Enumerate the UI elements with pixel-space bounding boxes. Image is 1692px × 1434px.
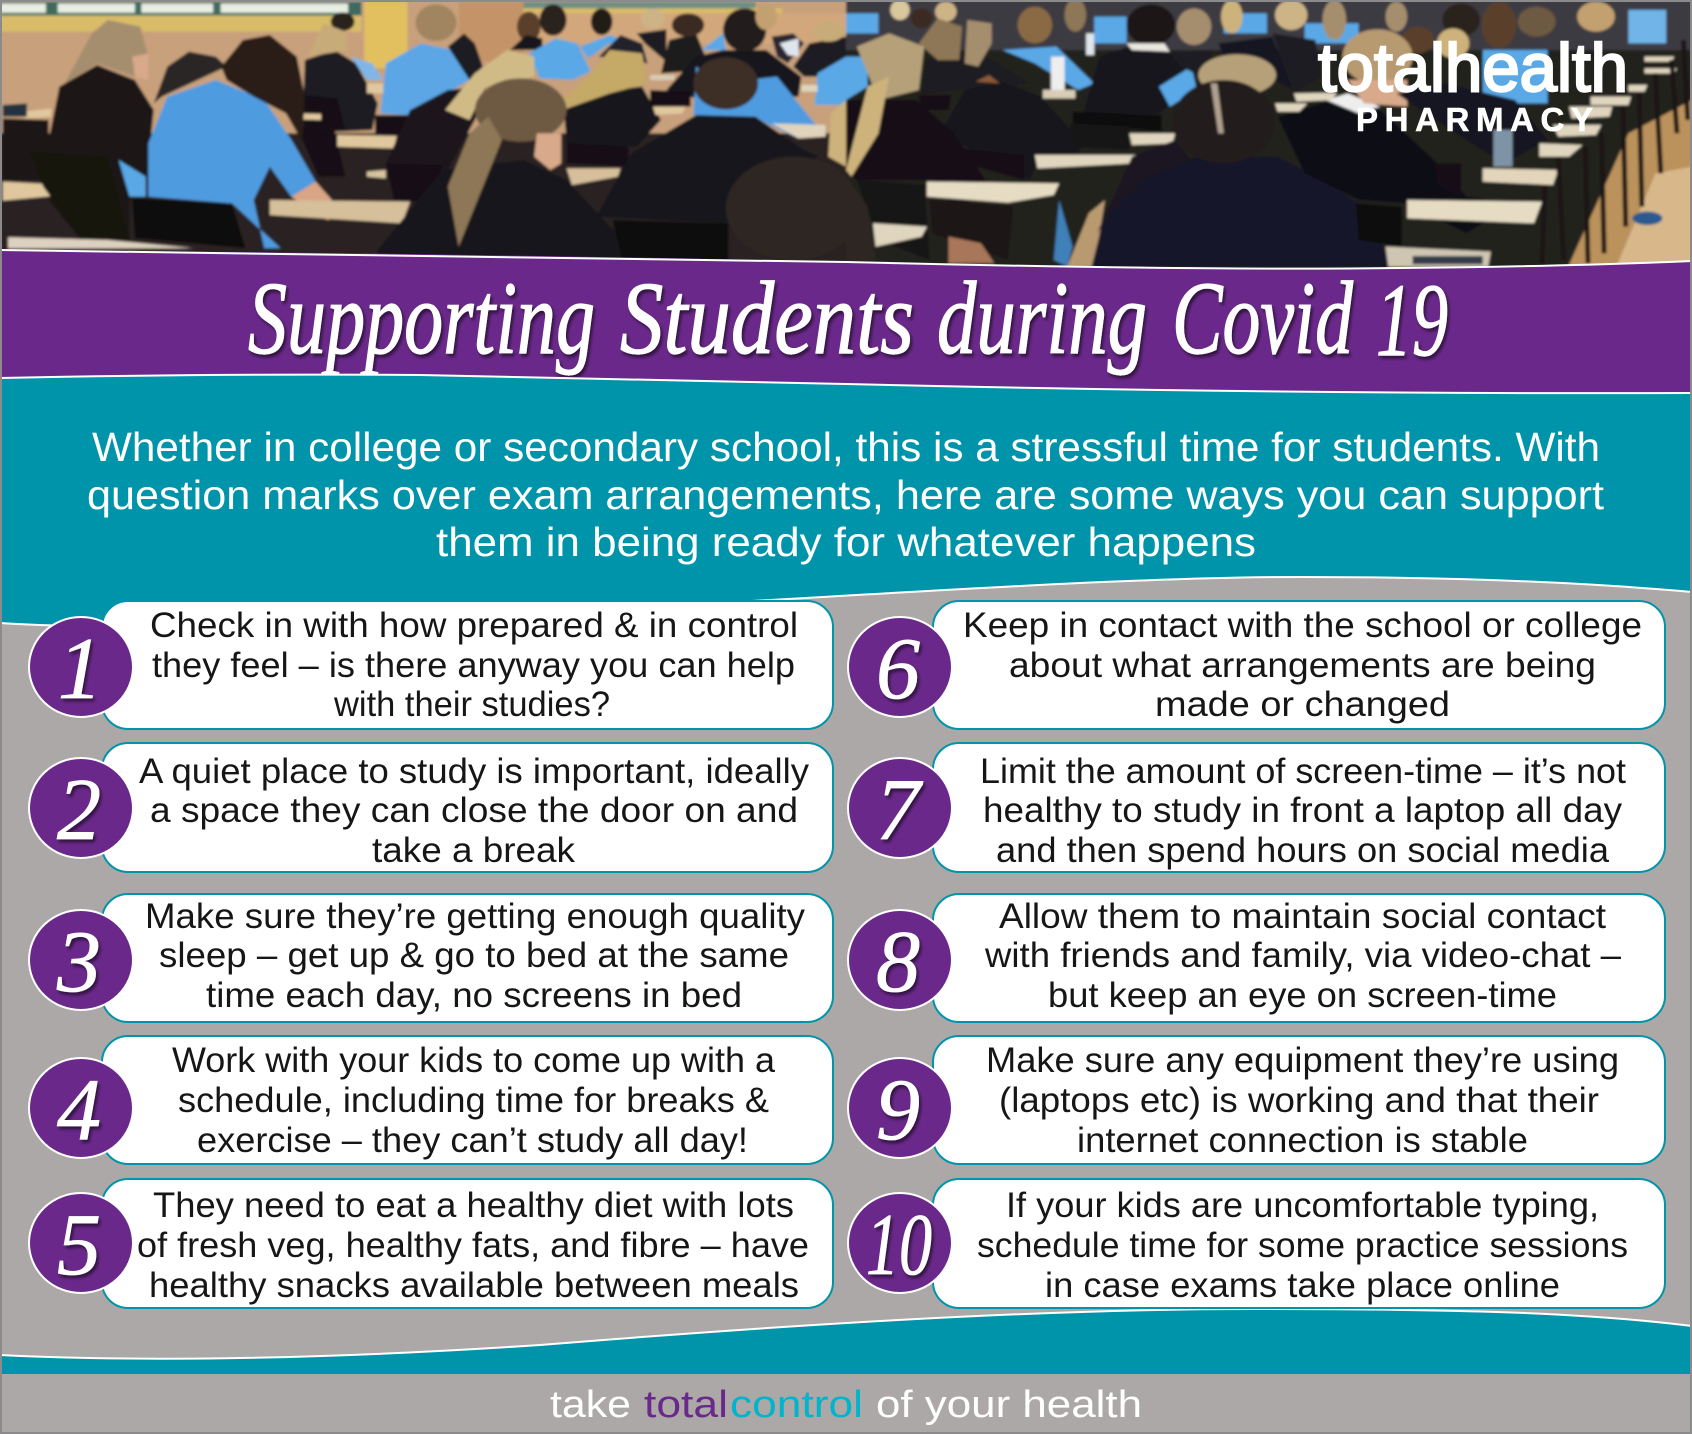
footer tagline: take: [550, 1384, 631, 1426]
tip 10: in case exams take place online: [1045, 1266, 1560, 1305]
title text: 19: [1376, 263, 1448, 378]
title text: [248, 261, 1448, 378]
teal intro panel: [0, 375, 1692, 626]
tip 8: Allow them to maintain social contact: [999, 897, 1606, 936]
tip 3: time each day, no screens in bed: [206, 976, 742, 1015]
tip 7: Limit the amount of screen-time – it’s not: [980, 752, 1626, 791]
footer tagline: of your health: [876, 1384, 1142, 1426]
title text: Covid: [1172, 261, 1354, 376]
tip 5: of fresh veg, healthy fats, and fibre – have: [137, 1226, 809, 1265]
tip 8: [848, 894, 1665, 1022]
logo: totalhealth pharmacy: totalhealth: [1318, 30, 1628, 106]
tip 7: healthy to study in front a laptop all day: [983, 791, 1623, 830]
title text: Supporting: [248, 261, 595, 376]
tip 6: Keep in contact with the school or college: [963, 606, 1642, 645]
tip 2: A quiet place to study is important, ideally: [139, 752, 810, 791]
tip 10: [848, 1179, 1665, 1308]
tip 1: Check in with how prepared & in control: [150, 606, 798, 645]
header photo: students in exam hall: [0, 0, 1692, 277]
title banner: [0, 250, 1692, 393]
tip 9: (laptops etc) is working and that their: [999, 1081, 1599, 1120]
tip 4: 4: [57, 1062, 101, 1159]
tip 6: about what arrangements are being: [1009, 646, 1596, 685]
title text: Students: [620, 261, 914, 376]
tip 8: with friends and family, via video-chat –: [984, 936, 1622, 975]
title text: during: [937, 261, 1147, 376]
intro text: [87, 424, 1605, 565]
tip 3: Make sure they’re getting enough quality: [145, 897, 806, 936]
tip 4: schedule, including time for breaks &: [178, 1081, 769, 1120]
tip 9: internet connection is stable: [1077, 1121, 1528, 1160]
tip 9: Make sure any equipment they’re using: [986, 1041, 1619, 1080]
tip 7: 7: [876, 762, 924, 859]
tip 5: 5: [57, 1197, 101, 1294]
tip 1: they feel – is there anyway you can help: [152, 646, 795, 685]
tip 4: Work with your kids to come up with a: [172, 1041, 776, 1080]
footer tagline: control: [730, 1384, 863, 1426]
logo: totalhealth pharmacy: [1318, 30, 1628, 138]
tip 10: schedule time for some practice sessions: [977, 1226, 1628, 1265]
tip 7: [848, 743, 1665, 872]
intro text: Whether in college or secondary school, this is a stressful time for students. With: [92, 424, 1600, 470]
tip 8: but keep an eye on screen-time: [1048, 976, 1557, 1015]
tip 4: exercise – they can’t study all day!: [197, 1121, 748, 1160]
tip 10: 10: [866, 1197, 932, 1294]
tip 1: 1: [58, 621, 102, 718]
tip 7: and then spend hours on social media: [996, 831, 1610, 870]
tip 3: [29, 894, 833, 1022]
tip 5: healthy snacks available between meals: [149, 1266, 799, 1305]
tip 6: 6: [876, 621, 920, 718]
tip 1: with their studies?: [333, 685, 610, 724]
tip 6: [848, 601, 1665, 729]
tip 10: If your kids are uncomfortable typing,: [1006, 1186, 1599, 1225]
tip 5: [29, 1179, 833, 1308]
tip 9: 9: [876, 1062, 920, 1159]
intro text: question marks over exam arrangements, here are some ways you can support: [87, 472, 1605, 518]
tip 1: [29, 601, 833, 729]
tip 6: made or changed: [1155, 685, 1450, 724]
intro text: them in being ready for whatever happens: [436, 519, 1256, 565]
tip 2: a space they can close the door on and: [150, 791, 798, 830]
tip 3: 3: [56, 914, 101, 1011]
footer tagline: total: [644, 1384, 728, 1426]
tip 4: [29, 1036, 833, 1164]
tip 2: 2: [57, 762, 101, 859]
tip 9: [848, 1036, 1665, 1164]
bottom teal wave: [0, 1309, 1692, 1374]
footer tagline: [550, 1384, 1142, 1426]
tip 2: [29, 743, 833, 872]
tip 3: sleep – get up & go to bed at the same: [159, 936, 789, 975]
tip 8: 8: [876, 914, 920, 1011]
tip 5: They need to eat a healthy diet with lots: [153, 1186, 794, 1225]
logo: totalhealth pharmacy: PHARMACY: [1356, 101, 1593, 138]
tip 2: take a break: [372, 831, 576, 870]
